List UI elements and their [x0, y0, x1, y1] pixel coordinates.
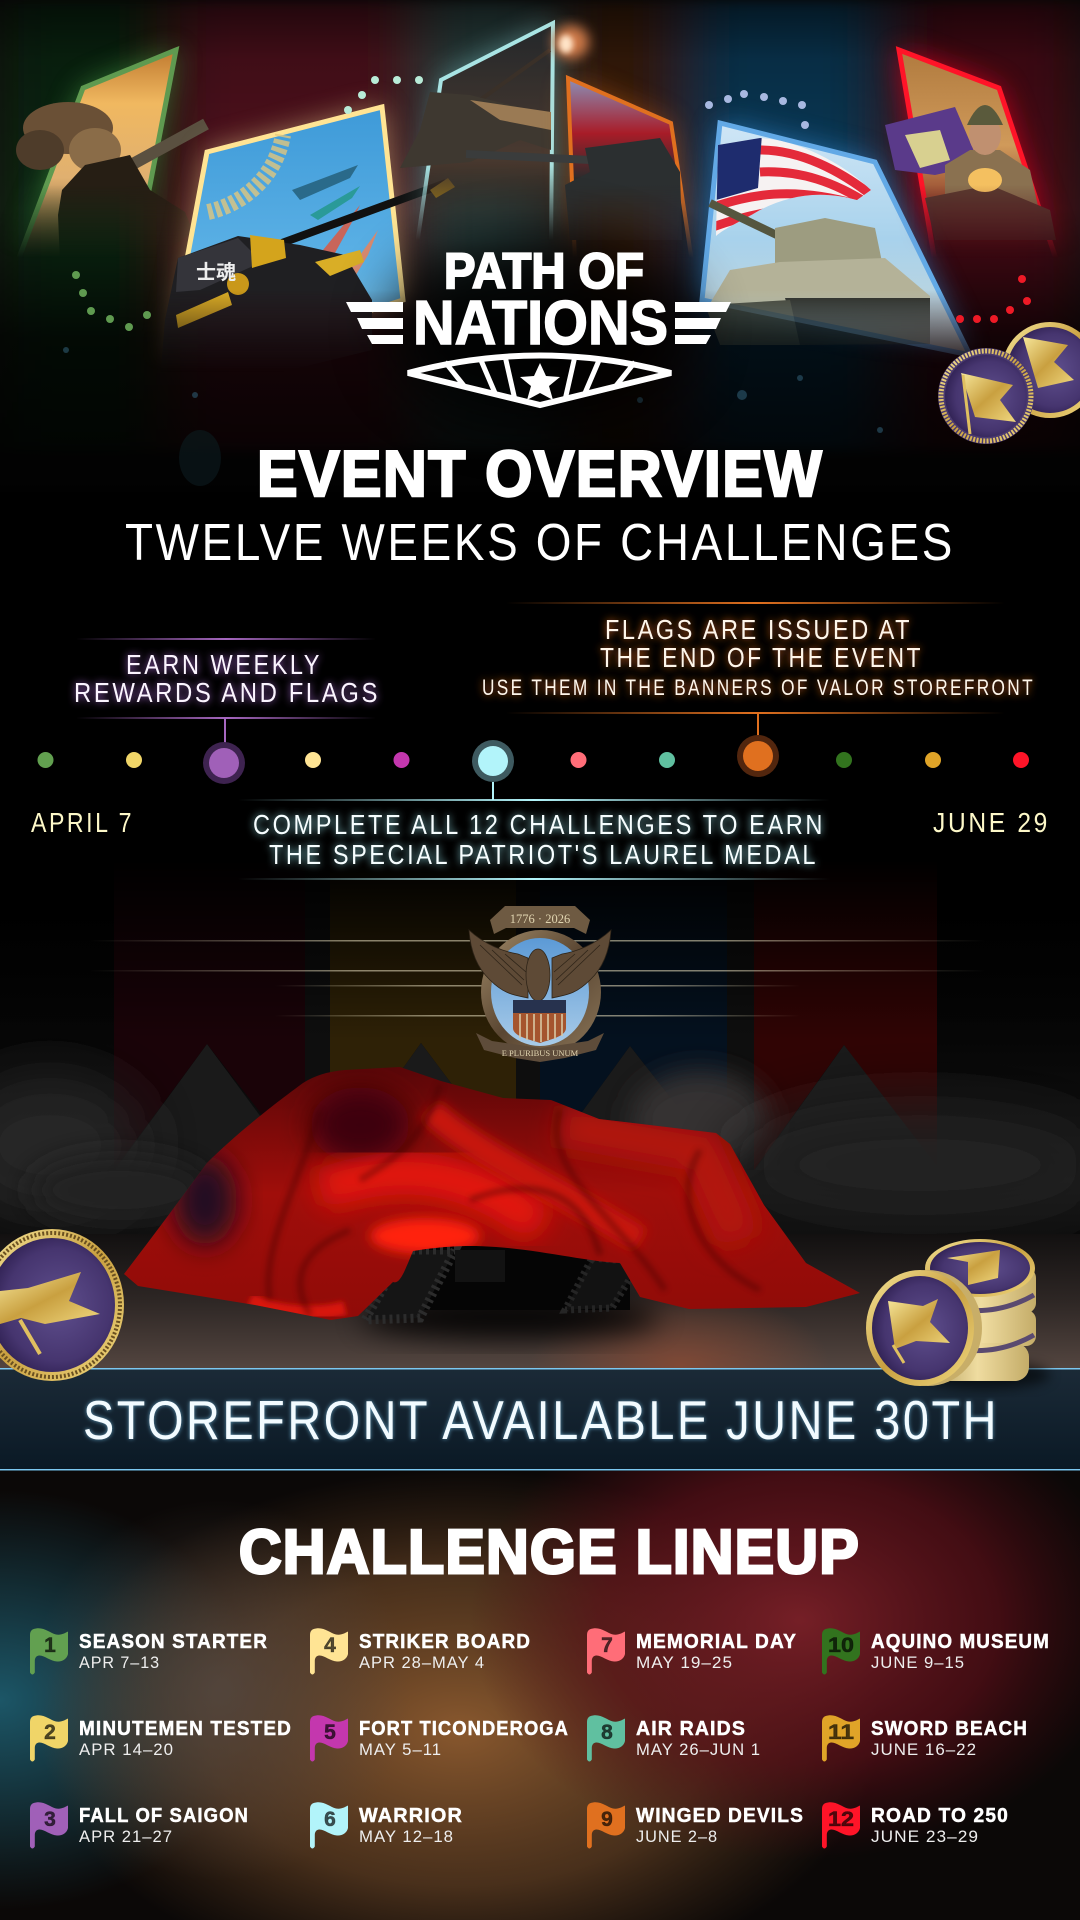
smoke clouds	[0, 1070, 1080, 1225]
lineup: challenge 6: MAY 12–18	[359, 1827, 454, 1846]
callout: complete all challenges: THE SPECIAL PATRIOT'S LAUREL MEDAL	[269, 839, 818, 870]
lineup: challenge 4: APR 28–MAY 4	[359, 1653, 485, 1672]
top ribbon	[490, 906, 590, 934]
lineup: challenge 6: 6	[324, 1808, 336, 1831]
lineup: challenge 5: FORT TICONDEROGA	[359, 1717, 569, 1740]
lineup: challenge 1: SEASON STARTER	[79, 1630, 268, 1653]
header background light columns	[0, 0, 1080, 496]
callout: complete all challenges	[238, 799, 830, 880]
eagle wings	[469, 930, 611, 1001]
subheading: twelve weeks: TWELVE WEEKS OF CHALLENGES	[125, 514, 955, 572]
red cloth covering the tank	[124, 1067, 860, 1320]
lineup: challenge 11: JUNE 16–22	[871, 1740, 977, 1759]
Sherman tank	[705, 203, 930, 345]
logo: Path of Nations: NATIONS	[413, 289, 668, 358]
card: blue, US flag and Sherman	[702, 123, 970, 355]
lineup: challenge 2: MINUTEMEN TESTED	[79, 1717, 292, 1740]
lineup: challenge 10	[822, 1628, 1050, 1674]
dark vignette behind logo	[390, 240, 690, 420]
lineup: challenge 4: 4	[324, 1634, 336, 1657]
tank: green card	[58, 124, 206, 262]
US flag	[716, 138, 871, 236]
tank: black and gold: 士魂	[196, 261, 236, 284]
logo: Path of Nations: PATH OF	[444, 243, 644, 299]
lineup: challenge 9: JUNE 2–8	[636, 1827, 718, 1846]
timeline: twelve week dots	[38, 713, 1029, 800]
lineup: challenge 9: 9	[601, 1808, 613, 1831]
heading: challenge lineup: CHALLENGE LINEUP	[239, 1518, 860, 1587]
top ribbon: 1776 · 2026	[510, 912, 570, 926]
lineup: challenge 7: MEMORIAL DAY	[636, 1630, 797, 1653]
coin stack: right	[866, 1239, 1050, 1389]
lineup: challenge 7: 7	[601, 1634, 613, 1657]
stage floor	[0, 1234, 1080, 1440]
lineup section background	[0, 1471, 1080, 1920]
card: orange, flag and tank	[466, 78, 692, 262]
lineup: challenge 3	[30, 1802, 249, 1848]
lineup: challenge 7: MAY 19–25	[636, 1653, 733, 1672]
banner stage backdrop	[0, 860, 1080, 1234]
lineup: challenge 12: 12	[828, 1808, 854, 1831]
coin: left large	[0, 1229, 124, 1381]
lineup: challenge 11: 11	[828, 1721, 854, 1744]
soldier figure	[945, 105, 1038, 205]
lineup: challenge 12	[822, 1802, 1009, 1848]
lineup: challenge 8: 8	[601, 1721, 613, 1744]
lineup: challenge 3: FALL OF SAIGON	[79, 1804, 249, 1827]
lineup: challenge 2: APR 14–20	[79, 1740, 174, 1759]
lineup: challenge 2	[30, 1715, 292, 1762]
callout: weekly rewards: EARN WEEKLY	[126, 649, 322, 680]
lineup: challenge 9	[587, 1802, 804, 1848]
lineup: challenge 6: WARRIOR	[359, 1804, 463, 1827]
lineup: challenge 4: STRIKER BOARD	[359, 1630, 531, 1653]
lineup: challenge 10: AQUINO MUSEUM	[871, 1630, 1050, 1653]
callout: flags issued: FLAGS ARE ISSUED AT	[605, 614, 912, 645]
lineup: challenge 10: JUNE 9–15	[871, 1653, 965, 1672]
card: cyan, firing tank	[400, 23, 589, 245]
lineup: challenge 4	[310, 1628, 531, 1674]
lineup: challenge 12: JUNE 23–29	[871, 1827, 979, 1846]
storefront band	[0, 1368, 1080, 1470]
card: green, fire and tank	[16, 50, 206, 263]
lineup: challenge 10: 10	[828, 1634, 854, 1657]
callout: flags issued	[482, 602, 1035, 714]
callout: weekly rewards: REWARDS AND FLAGS	[74, 677, 380, 708]
horizontal rays behind medal	[90, 940, 985, 1016]
lineup: challenge 5: 5	[324, 1721, 336, 1744]
card: red, commander	[885, 50, 1057, 262]
tank tracks under cloth	[365, 1245, 640, 1320]
muzzle flash	[553, 25, 589, 59]
logo: Path of Nations	[346, 243, 731, 405]
lineup: challenge 1: APR 7–13	[79, 1653, 160, 1672]
lineup: challenge 8	[587, 1715, 761, 1762]
bottom ribbon	[476, 1033, 604, 1062]
lineup: challenge 5	[310, 1715, 569, 1762]
tank: black and gold	[160, 178, 455, 385]
shield	[513, 1000, 566, 1043]
decorative progress dots	[63, 76, 1031, 486]
timeline start date: APRIL 7	[31, 807, 134, 838]
bottom ribbon: E PLURIBUS UNUM	[502, 1048, 579, 1058]
wing stripes	[346, 302, 731, 344]
lineup: challenge 5: MAY 5–11	[359, 1740, 442, 1759]
lineup: challenge 1: 1	[44, 1634, 56, 1657]
lineup: challenge 7	[587, 1628, 797, 1674]
callout: complete all challenges: COMPLETE ALL 12 CHALLENGES TO EARN	[253, 809, 825, 840]
timeline end date: JUNE 29	[933, 807, 1050, 838]
lineup: challenge 3: APR 21–27	[79, 1827, 173, 1846]
medal: Patriot's Laurel	[469, 906, 611, 1062]
emblem	[408, 356, 671, 405]
callout: flags issued: THE END OF THE EVENT	[600, 642, 923, 673]
lineup: challenge 6	[310, 1802, 463, 1848]
lineup: challenge 11: SWORD BEACH	[871, 1717, 1028, 1740]
lineup: challenge 11	[822, 1715, 1028, 1762]
lineup: challenge 12: ROAD TO 250	[871, 1804, 1009, 1827]
lineup: challenge 2: 2	[44, 1721, 56, 1744]
lineup: challenge 8: MAY 26–JUN 1	[636, 1740, 761, 1759]
callout: weekly rewards	[74, 638, 380, 719]
coins: top right pair	[938, 322, 1080, 444]
lineup: challenge 9: WINGED DEVILS	[636, 1804, 804, 1827]
lineup: challenge 8: AIR RAIDS	[636, 1717, 746, 1740]
heading: event overview: EVENT OVERVIEW	[257, 437, 823, 510]
lineup: challenge 3: 3	[44, 1808, 56, 1831]
lineup: challenge 1	[30, 1628, 268, 1674]
card: yellow, blue sky	[160, 107, 455, 385]
